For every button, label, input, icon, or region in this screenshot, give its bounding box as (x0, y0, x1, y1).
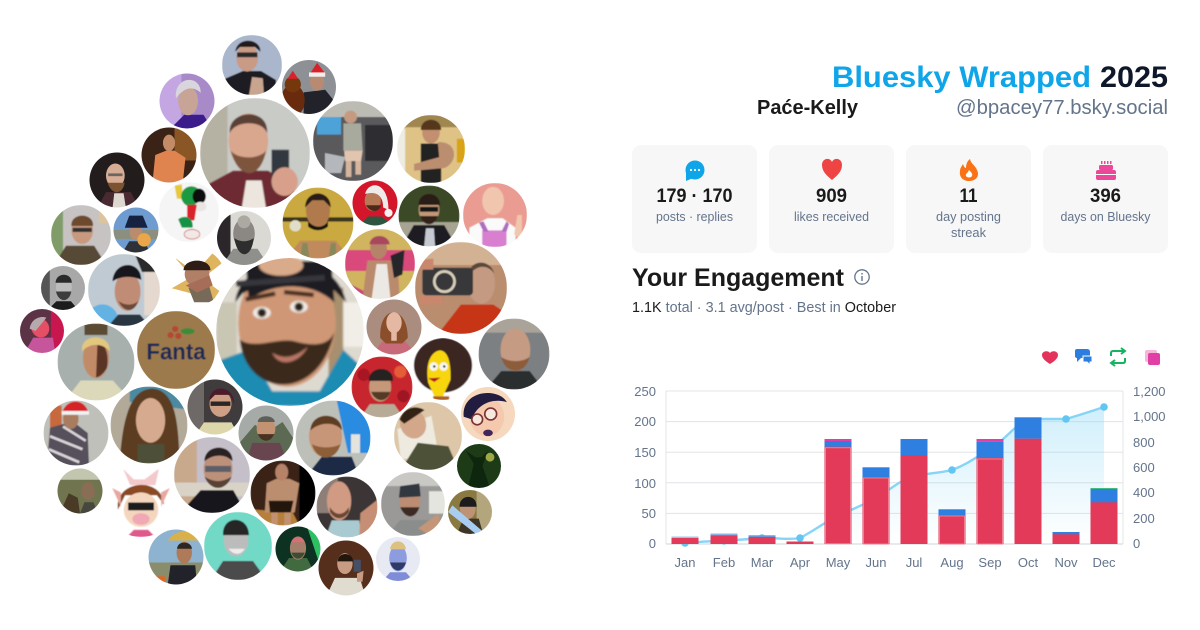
avatar: green goblin (457, 444, 501, 488)
avatar: teal background black and white (204, 512, 272, 580)
bar: Jan (672, 536, 698, 544)
right axis labels: 0 (1133, 536, 1140, 551)
panel: likes received (769, 145, 894, 253)
heading: title (832, 61, 1168, 94)
bar: Mar (748, 535, 776, 544)
avatar: gym selfie (313, 101, 393, 181)
engagement summary: 1.1K total · 3.1 avg/post · Best in October (632, 300, 896, 316)
stat label: day posting (936, 209, 1001, 224)
grid lines (666, 391, 1123, 544)
avatar: Fanta shirt (137, 311, 215, 389)
month labels: Jan (675, 555, 695, 570)
icon: quotes (1145, 350, 1160, 365)
bar: Oct (1014, 417, 1042, 544)
avatar: sunglasses leather jacket (398, 186, 460, 246)
avatar: mountain man (238, 406, 294, 460)
avatar: sticker man (172, 254, 222, 302)
bar: Aug (938, 509, 966, 544)
avatar: green neon (276, 526, 320, 572)
month labels: Oct (1018, 555, 1038, 570)
avatar: cartoon yellow face with curly hair (412, 338, 474, 400)
avatar: blue sky man (296, 400, 370, 476)
stat value: 909 (816, 186, 847, 207)
avatar: silver hair purple (160, 74, 214, 128)
panel: day posting streak (906, 145, 1031, 253)
avatar: glasses by tree (51, 205, 111, 265)
right axis labels: 1,200 (1133, 384, 1166, 399)
avatar: yellow wall tank (282, 188, 354, 258)
month labels: May (826, 555, 851, 570)
avatar: cartoon cow (105, 465, 177, 537)
bar: Apr (786, 542, 814, 544)
display name: Paće-Kelly (757, 97, 859, 119)
avatar: bald man selfie arm (316, 476, 378, 538)
stat label: likes received (794, 209, 869, 224)
month labels: Aug (940, 555, 964, 570)
bar: Nov (1052, 532, 1080, 544)
icon: likes (1042, 351, 1058, 364)
stacked bars (672, 417, 1118, 544)
avatar: cartoon glasses (461, 387, 515, 441)
chart legend (1042, 348, 1160, 366)
panel: days on Bluesky (1043, 145, 1168, 253)
bar: Jul (900, 439, 928, 544)
month labels: Nov (1054, 555, 1078, 570)
bar: May (824, 439, 852, 544)
left axis labels: 50 (642, 506, 656, 521)
title: Bluesky Wrapped: Bluesky Wrapped (832, 61, 1091, 94)
month labels: Jul (906, 555, 922, 570)
avatar: long brown hair (110, 386, 188, 464)
icon: cake (1096, 161, 1116, 180)
avatar: santa hat on red (352, 180, 398, 226)
icon: speech bubble (686, 160, 704, 181)
stat value: 11 (960, 186, 978, 207)
title: year: 2025 (1100, 61, 1168, 94)
icon: reposts (1111, 348, 1125, 366)
stat value: 396 (1090, 186, 1121, 207)
avatar: santa hat patterned jacket (44, 400, 108, 466)
handle: @bpacey77.bsky.social (956, 96, 1168, 119)
avatar: dark room mirror (318, 540, 374, 596)
icon: replies (1075, 349, 1092, 365)
right axis labels: 400 (1133, 485, 1155, 500)
month labels: Dec (1092, 555, 1116, 570)
avatar: black and white man (41, 266, 85, 310)
bar: Sep (976, 439, 1004, 544)
month labels: Feb (713, 555, 735, 570)
avatar: red flowers (352, 356, 412, 418)
avatar: reclining man olive shirt (394, 402, 462, 470)
right axis labels: 1,000 (1133, 409, 1166, 424)
avatar: smiling woman (366, 300, 422, 354)
avatar: glasses black shirt (174, 437, 250, 513)
avatar: pink blurred selfie (20, 309, 64, 353)
left axis labels: 0 (649, 536, 656, 551)
avatar: dark background beard (90, 152, 144, 208)
icon: flame (960, 159, 978, 181)
avatar: orange sweater (142, 128, 196, 182)
heading: your engagement: Your Engagement (632, 264, 845, 292)
line markers (681, 403, 1108, 547)
avatar: small outdoor man (58, 468, 102, 514)
right axis labels: 200 (1133, 511, 1155, 526)
bar: Feb (710, 534, 738, 544)
avatar: glasses with light tube (448, 490, 492, 536)
stat label: days on Bluesky (1060, 209, 1151, 224)
month labels (675, 555, 1116, 570)
avatar: pink bar tank top (345, 229, 415, 299)
avatar: cartoon martian (159, 182, 219, 242)
avatar: Fanta shirt: Fanta (146, 338, 207, 364)
left axis labels: 150 (634, 445, 656, 460)
avatar cluster (20, 35, 550, 596)
icon: heart (822, 159, 842, 180)
left axis labels (634, 384, 656, 551)
month labels: Sep (978, 555, 1002, 570)
right axis labels (1133, 384, 1166, 551)
month labels: Mar (751, 555, 774, 570)
stat value: 179 · 170 (656, 186, 732, 207)
avatar: man in glasses (222, 35, 282, 95)
right axis labels: 600 (1133, 460, 1155, 475)
avatar: large centre selfie (216, 255, 364, 406)
avatar: bald bearded man (478, 318, 550, 390)
icon: info (855, 270, 869, 284)
line: cumulative total (685, 407, 1104, 543)
avatar: pink cartoon overalls (463, 183, 527, 247)
avatar: santa bear (281, 60, 336, 117)
right axis labels: 800 (1133, 435, 1155, 450)
month labels: Jun (866, 555, 886, 570)
avatar: man in black cap (88, 254, 160, 326)
avatar: beach umbrella man (148, 530, 204, 584)
avatar: large mirror selfie (200, 98, 310, 208)
avatar: black and white beard (217, 211, 271, 265)
left axis labels: 100 (634, 476, 656, 491)
avatar: bucket hat and bubble (114, 208, 158, 252)
month labels: Apr (790, 555, 811, 570)
chart: monthly engagement (634, 384, 1166, 570)
avatar: shirtless man in dark room (250, 460, 316, 526)
bar: Dec (1090, 488, 1118, 544)
bar: Jun (862, 467, 890, 544)
avatar: red hoodie phone (415, 242, 507, 334)
avatar: glasses red hair (188, 380, 242, 434)
left axis labels: 200 (634, 414, 656, 429)
avatar: man in car (381, 472, 445, 536)
stat label: posts · replies (656, 209, 733, 224)
avatar: blond man (58, 324, 134, 400)
area: cumulative total (685, 407, 1104, 544)
panel: posts and replies (632, 145, 757, 253)
avatar: blue illustrated man (376, 537, 420, 581)
left axis labels: 250 (634, 384, 656, 399)
avatar: black tank muscle (397, 115, 465, 183)
stat label second line: streak (951, 225, 986, 240)
